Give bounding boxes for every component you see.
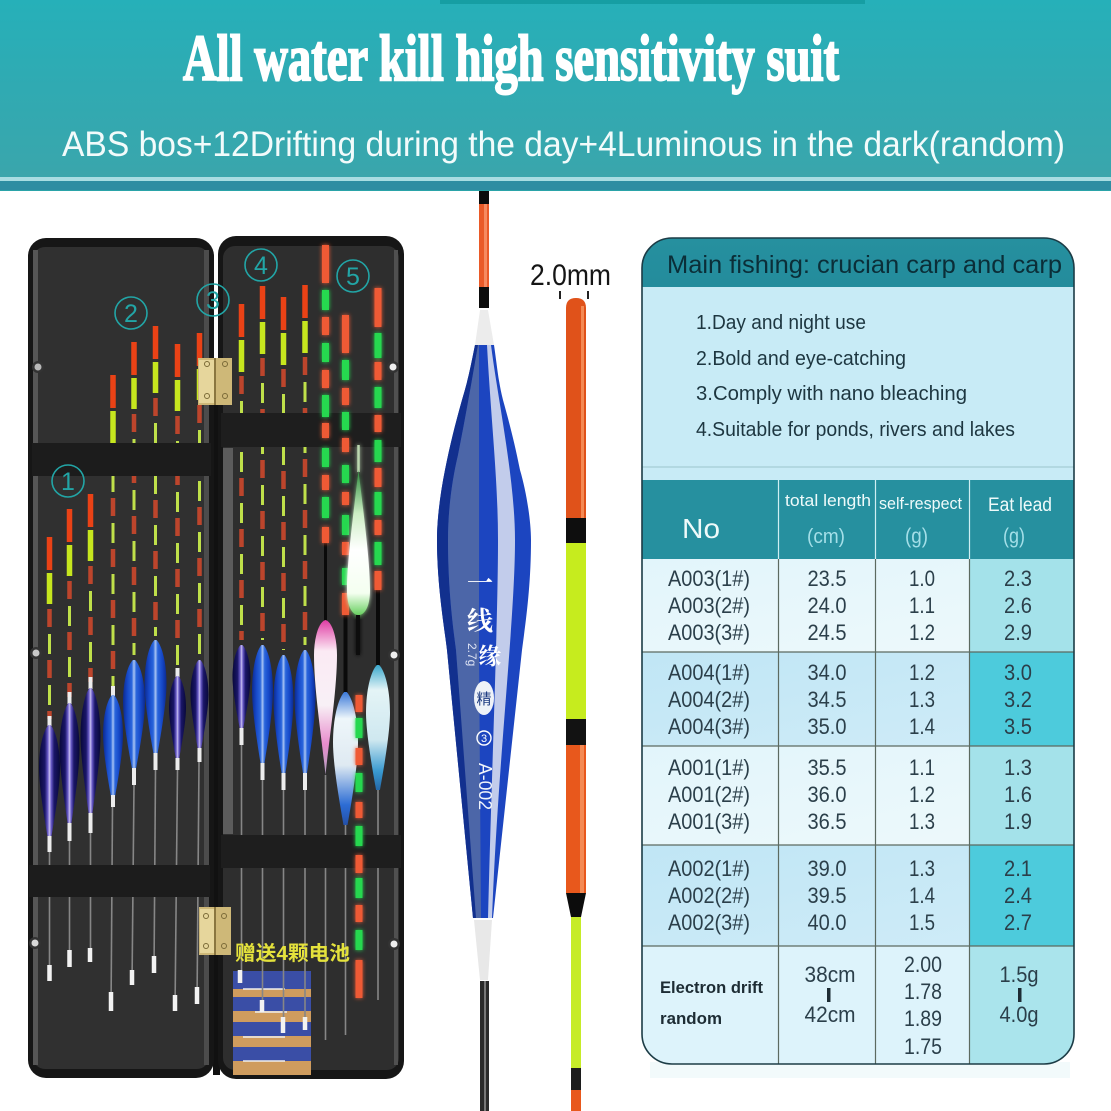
table row group A002: A002(1#) bbox=[668, 856, 750, 881]
float 8 bbox=[190, 333, 208, 1004]
float lettering bbox=[465, 563, 502, 810]
large float: tip close-up bbox=[566, 298, 586, 1111]
table row group A001: A001(3#) bbox=[668, 809, 750, 834]
table row: electron drift: 2.00 bbox=[904, 952, 942, 977]
table row group A001: 1.3 bbox=[909, 809, 935, 834]
float lettering: 缘 bbox=[478, 638, 502, 671]
velcro strap: top left bbox=[32, 443, 211, 476]
table row group A001: 1.2 bbox=[909, 782, 935, 807]
table row: electron drift bbox=[660, 952, 1038, 1059]
table row group A003: A003(1#) bbox=[668, 566, 750, 591]
table header: (g) bbox=[1003, 525, 1025, 548]
table row group A004: A004(2#) bbox=[668, 687, 750, 712]
table row: electron drift: 1.75 bbox=[904, 1034, 942, 1059]
float 17 overlay luminous tip bbox=[356, 695, 362, 998]
marker 4: 4 bbox=[254, 252, 268, 280]
screws bbox=[29, 361, 400, 950]
table header: (cm) bbox=[807, 526, 845, 548]
table row group A001: 1.1 bbox=[909, 755, 935, 780]
panel heading: Main fishing: crucian carp and carp bbox=[667, 251, 1062, 279]
table row group A003: 2.9 bbox=[1004, 620, 1032, 645]
table row: electron drift: 1.89 bbox=[904, 1006, 942, 1031]
table row group A002: 39.0 bbox=[808, 856, 846, 881]
table row group A002: 40.0 bbox=[808, 910, 846, 935]
table row group A002: 2.1 bbox=[1004, 856, 1032, 881]
float 11 bbox=[274, 297, 294, 1033]
float 15 white cyan luminous bbox=[366, 288, 390, 1000]
header banner bbox=[0, 0, 1111, 191]
battery card bbox=[233, 971, 311, 1075]
features list: 1.Day and night use bbox=[696, 312, 866, 334]
panel: specification bbox=[642, 238, 1074, 1078]
diameter label: 2.0mm bbox=[530, 259, 611, 292]
table row group A002: 1.5 bbox=[909, 910, 935, 935]
float lettering: 一 bbox=[467, 563, 493, 600]
table row group A003: 23.5 bbox=[808, 566, 846, 591]
float 16 green luminous bbox=[347, 445, 370, 655]
marker 1: 1 bbox=[61, 468, 75, 496]
table row group A001: 1.9 bbox=[1004, 809, 1032, 834]
table row group A004: 34.0 bbox=[808, 660, 846, 685]
float lettering: 2.7g bbox=[465, 643, 479, 666]
marker 2 bbox=[115, 297, 147, 329]
float 12 bbox=[294, 285, 316, 1030]
marker 4 bbox=[245, 249, 277, 281]
marker 2: 2 bbox=[124, 300, 138, 328]
table row group A004 bbox=[668, 660, 1032, 739]
table row group A003: 1.1 bbox=[909, 593, 935, 618]
table header: total length bbox=[785, 491, 871, 510]
table row group A004: 1.3 bbox=[909, 687, 935, 712]
table row group A004: 3.2 bbox=[1004, 687, 1032, 712]
table row group A004: 1.2 bbox=[909, 660, 935, 685]
float 6 bbox=[144, 326, 166, 973]
float 5 bbox=[123, 342, 145, 985]
features list: 2.Bold and eye-catching bbox=[696, 348, 906, 370]
table row group A002: 1.3 bbox=[909, 856, 935, 881]
float 10 bbox=[252, 286, 273, 1012]
table row group A003: A003(3#) bbox=[668, 620, 750, 645]
table row group A002: A002(3#) bbox=[668, 910, 750, 935]
features list: 3.Comply with nano bleaching bbox=[696, 383, 967, 405]
table row group A003: A003(2#) bbox=[668, 593, 750, 618]
table row: electron drift: 1.5g bbox=[1000, 962, 1038, 987]
title: All water kill high sensitivity suit bbox=[183, 22, 839, 95]
float 2 bbox=[60, 509, 80, 967]
table row group A001: A001(2#) bbox=[668, 782, 750, 807]
table row: electron drift: 42cm bbox=[804, 1002, 856, 1027]
table row: electron drift: 38cm bbox=[804, 962, 856, 987]
table row group A003: 1.0 bbox=[909, 566, 935, 591]
features list bbox=[696, 312, 1015, 441]
table row group A001: A001(1#) bbox=[668, 755, 750, 780]
marker 3 bbox=[197, 238, 229, 358]
table row: electron drift: random bbox=[660, 1009, 722, 1028]
table row: electron drift: 4.0g bbox=[1000, 1002, 1038, 1027]
hinge: bottom bbox=[199, 907, 231, 955]
float lettering: A-002 bbox=[475, 763, 495, 810]
table row group A004: 34.5 bbox=[808, 687, 846, 712]
battery gift label: 赠送4颗电池 bbox=[235, 942, 350, 965]
features list: 4.Suitable for ponds, rivers and lakes bbox=[696, 419, 1015, 441]
table row group A004: A004(3#) bbox=[668, 714, 750, 739]
velcro strap: bottom left bbox=[29, 865, 210, 897]
velcro strap: top right bbox=[221, 413, 401, 447]
large float: blue body close-up bbox=[437, 191, 531, 1111]
table row group A001 bbox=[668, 755, 1032, 834]
table row: electron drift: 1.78 bbox=[904, 979, 942, 1004]
table row group A003: 24.0 bbox=[808, 593, 846, 618]
table header: self-respect bbox=[879, 494, 962, 513]
float 7 bbox=[169, 344, 186, 1011]
table row group A003: 24.5 bbox=[808, 620, 846, 645]
table row group A004: 1.4 bbox=[909, 714, 935, 739]
float lettering: 线 bbox=[467, 601, 493, 638]
table row group A004: 35.0 bbox=[808, 714, 846, 739]
table row group A004: A004(1#) bbox=[668, 660, 750, 685]
table row group A002: 2.4 bbox=[1004, 883, 1032, 908]
table row group A001: 1.3 bbox=[1004, 755, 1032, 780]
table header: Eat lead bbox=[988, 495, 1052, 516]
table header bbox=[682, 491, 1052, 548]
table header: (g) bbox=[905, 525, 928, 548]
table row group A003: 2.6 bbox=[1004, 593, 1032, 618]
hinge: top bbox=[198, 358, 232, 405]
marker 3: 3 bbox=[206, 287, 220, 315]
marker 5 bbox=[337, 260, 369, 292]
table header: No bbox=[682, 513, 720, 544]
table row group A004: 3.5 bbox=[1004, 714, 1032, 739]
table row group A003: 1.2 bbox=[909, 620, 935, 645]
table row group A004: 3.0 bbox=[1004, 660, 1032, 685]
table row group A003: 2.3 bbox=[1004, 566, 1032, 591]
subtitle: ABS bos+12Drifting during the day+4Luminous in the dark(random) bbox=[62, 125, 1065, 164]
float 1 bbox=[39, 537, 60, 981]
table row group A001: 36.0 bbox=[808, 782, 846, 807]
panel: open float box bbox=[28, 236, 404, 1079]
table row: electron drift: Electron drift bbox=[660, 978, 763, 997]
float 14 white blue luminous bbox=[333, 315, 358, 1035]
table row group A001: 35.5 bbox=[808, 755, 846, 780]
float 9 bbox=[232, 304, 250, 983]
table row group A001: 36.5 bbox=[808, 809, 846, 834]
float 4 bbox=[103, 375, 123, 1011]
float lettering: 精 bbox=[476, 691, 492, 708]
table row group A002 bbox=[668, 856, 1032, 935]
table row group A002: A002(2#) bbox=[668, 883, 750, 908]
table row group A001: 1.6 bbox=[1004, 782, 1032, 807]
table row group A002: 39.5 bbox=[808, 883, 846, 908]
float lettering: 3 bbox=[481, 733, 487, 745]
marker 1 bbox=[52, 465, 84, 497]
velcro strap: bottom right bbox=[221, 835, 401, 868]
table row group A002: 1.4 bbox=[909, 883, 935, 908]
table row group A002: 2.7 bbox=[1004, 910, 1032, 935]
float 3 bbox=[80, 494, 100, 962]
marker 5: 5 bbox=[346, 263, 360, 291]
table row group A003 bbox=[668, 566, 1032, 645]
float 13 pink luminous bbox=[314, 245, 337, 1040]
